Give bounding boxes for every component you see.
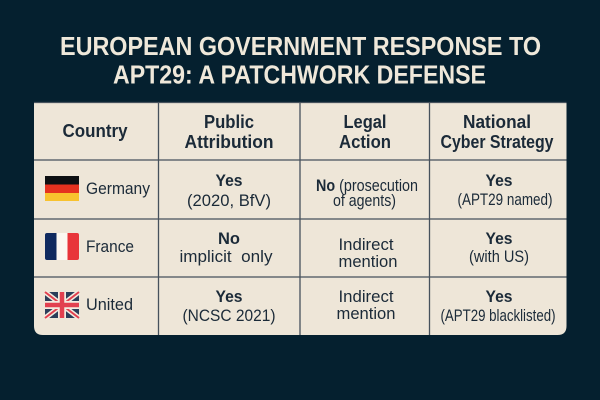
row: France: France (86, 238, 134, 256)
row: France: implicit only (180, 248, 273, 266)
header row: Action (339, 132, 391, 152)
row: Germany: Yes (486, 171, 512, 190)
header row: Cyber Strategy (440, 132, 554, 152)
row: United: (NCSC 2021) (182, 307, 276, 325)
row: United: mention (336, 305, 396, 323)
title: EUROPEAN GOVERNMENT RESPONSE TO (60, 31, 541, 61)
row: Germany: No (prosecution (316, 177, 418, 195)
icon: UK flag (45, 292, 79, 318)
header row (62, 112, 554, 152)
row: United: United (86, 296, 133, 314)
row: France: Indirect (338, 236, 394, 254)
title: APT29: A PATCHWORK DEFENSE (113, 60, 486, 90)
row: France (45, 229, 529, 271)
header row: National (463, 112, 531, 132)
icon: German flag (45, 176, 79, 201)
row: France: Yes (486, 229, 512, 248)
row: Germany (45, 171, 552, 210)
header row: Public (204, 112, 254, 132)
row: Germany: Yes (216, 171, 242, 190)
row: United: Yes (486, 287, 512, 306)
row: Germany: of agents) (333, 192, 396, 210)
header row: Legal (344, 112, 386, 132)
icon: French flag (45, 233, 79, 260)
header row: Country (62, 121, 128, 141)
row: United: (APT29 blacklisted) (440, 307, 556, 325)
row: Germany: (2020, BfV) (187, 192, 271, 210)
row: United: Yes (216, 287, 242, 306)
row: France: mention (338, 253, 398, 271)
row: France: No (218, 229, 240, 248)
row: Germany: Germany (86, 180, 151, 198)
header row: Attribution (184, 132, 274, 152)
row: United (45, 287, 556, 325)
table panel (34, 102, 566, 335)
row: France: (with US) (469, 248, 529, 266)
row: United: Indirect (338, 288, 394, 306)
title (60, 31, 541, 90)
row: Germany: (APT29 named) (458, 191, 552, 209)
